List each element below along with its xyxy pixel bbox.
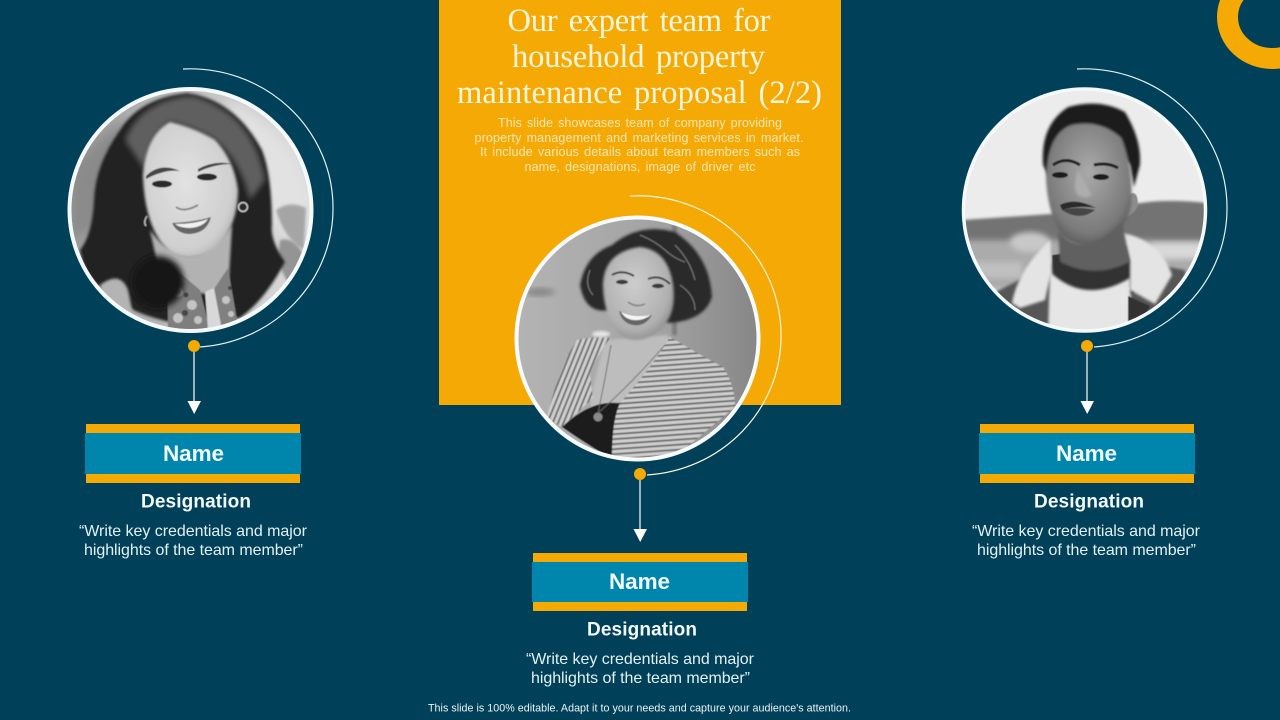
decorative ring: top right <box>1228 0 1280 58</box>
name bar: Name <box>163 441 224 466</box>
connector dot <box>634 468 646 480</box>
name bar: Name <box>1056 441 1117 466</box>
subtitle text: name, designations, image of driver etc <box>524 160 756 174</box>
portrait: woman with long hair <box>68 87 313 333</box>
arc around portrait <box>630 196 781 475</box>
title: Our expert team for <box>508 3 771 39</box>
credentials text <box>79 523 308 559</box>
subtitle text: This slide showcases team of company providing <box>498 116 782 130</box>
team member: right <box>962 69 1227 559</box>
name bar <box>979 424 1195 483</box>
credentials text: highlights of the team member” <box>531 670 750 687</box>
arrow <box>188 352 201 414</box>
designation: Designation <box>1034 492 1144 512</box>
arc around portrait <box>1077 69 1227 347</box>
designation: Designation <box>141 492 251 512</box>
panel: title block <box>439 0 841 405</box>
credentials text: “Write key credentials and major <box>526 651 755 668</box>
designation: Designation <box>587 620 697 640</box>
credentials text <box>972 523 1201 559</box>
arc around portrait <box>183 69 333 347</box>
name bar <box>85 424 301 483</box>
credentials text: “Write key credentials and major <box>972 523 1201 540</box>
subtitle text: It include various details about team members such as <box>480 145 800 159</box>
credentials text: “Write key credentials and major <box>79 523 308 540</box>
title: maintenance proposal (2/2) <box>457 75 822 111</box>
connector dot <box>1081 340 1093 352</box>
connector dot <box>188 340 200 352</box>
credentials text: highlights of the team member” <box>84 542 303 559</box>
credentials text: highlights of the team member” <box>977 542 1196 559</box>
credentials text <box>526 651 755 687</box>
subtitle text <box>474 116 804 174</box>
footer note: This slide is 100% editable. Adapt it to your needs and capture your audience's attention. <box>428 702 851 714</box>
team member: left <box>68 69 333 559</box>
arrow <box>634 480 647 542</box>
team member: center <box>515 196 781 687</box>
subtitle text: property management and marketing services in market. <box>474 131 804 145</box>
name bar: Name <box>609 569 670 594</box>
arrow <box>1080 352 1094 414</box>
title: household property <box>512 39 766 75</box>
name bar <box>532 553 748 611</box>
portrait: young man <box>962 87 1207 335</box>
portrait: woman with curly hair <box>515 216 760 461</box>
title <box>457 3 822 111</box>
